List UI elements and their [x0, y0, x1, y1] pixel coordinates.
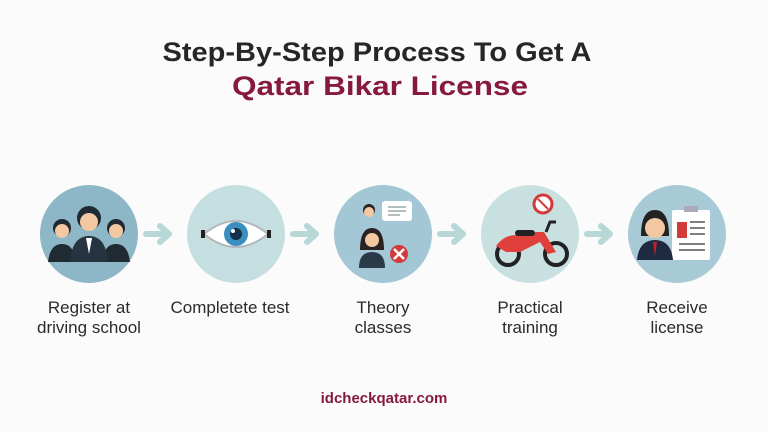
- label: Completete test: [170, 298, 290, 317]
- icon: people: [40, 185, 138, 283]
- title: [162, 37, 592, 101]
- title: Step-By-Step Process To Get A: [162, 37, 592, 67]
- step 5: receive: [628, 185, 726, 337]
- footer: idcheckqatar.com: [321, 390, 447, 407]
- label: Receive: [646, 298, 708, 317]
- label: training: [502, 318, 558, 337]
- label: Theory: [357, 298, 409, 317]
- label: classes: [355, 318, 411, 337]
- title: Qatar Bikar License: [232, 71, 528, 101]
- step 4: practical: [481, 185, 579, 337]
- label: driving school: [37, 318, 141, 337]
- step 3: theory: [334, 185, 432, 337]
- icon: eye: [187, 185, 285, 283]
- label: Register at: [48, 298, 130, 317]
- arrow 1: [146, 226, 169, 242]
- arrow 2: [293, 226, 316, 242]
- icon: license: [628, 185, 726, 283]
- arrow 4: [587, 226, 610, 242]
- label: license: [651, 318, 703, 337]
- label: Practical: [497, 298, 563, 317]
- icon: motorcycle: [481, 185, 579, 283]
- step 2: test: [170, 185, 290, 317]
- icon: teacher: [334, 185, 432, 283]
- arrow 3: [440, 226, 463, 242]
- step 1: register: [37, 185, 141, 337]
